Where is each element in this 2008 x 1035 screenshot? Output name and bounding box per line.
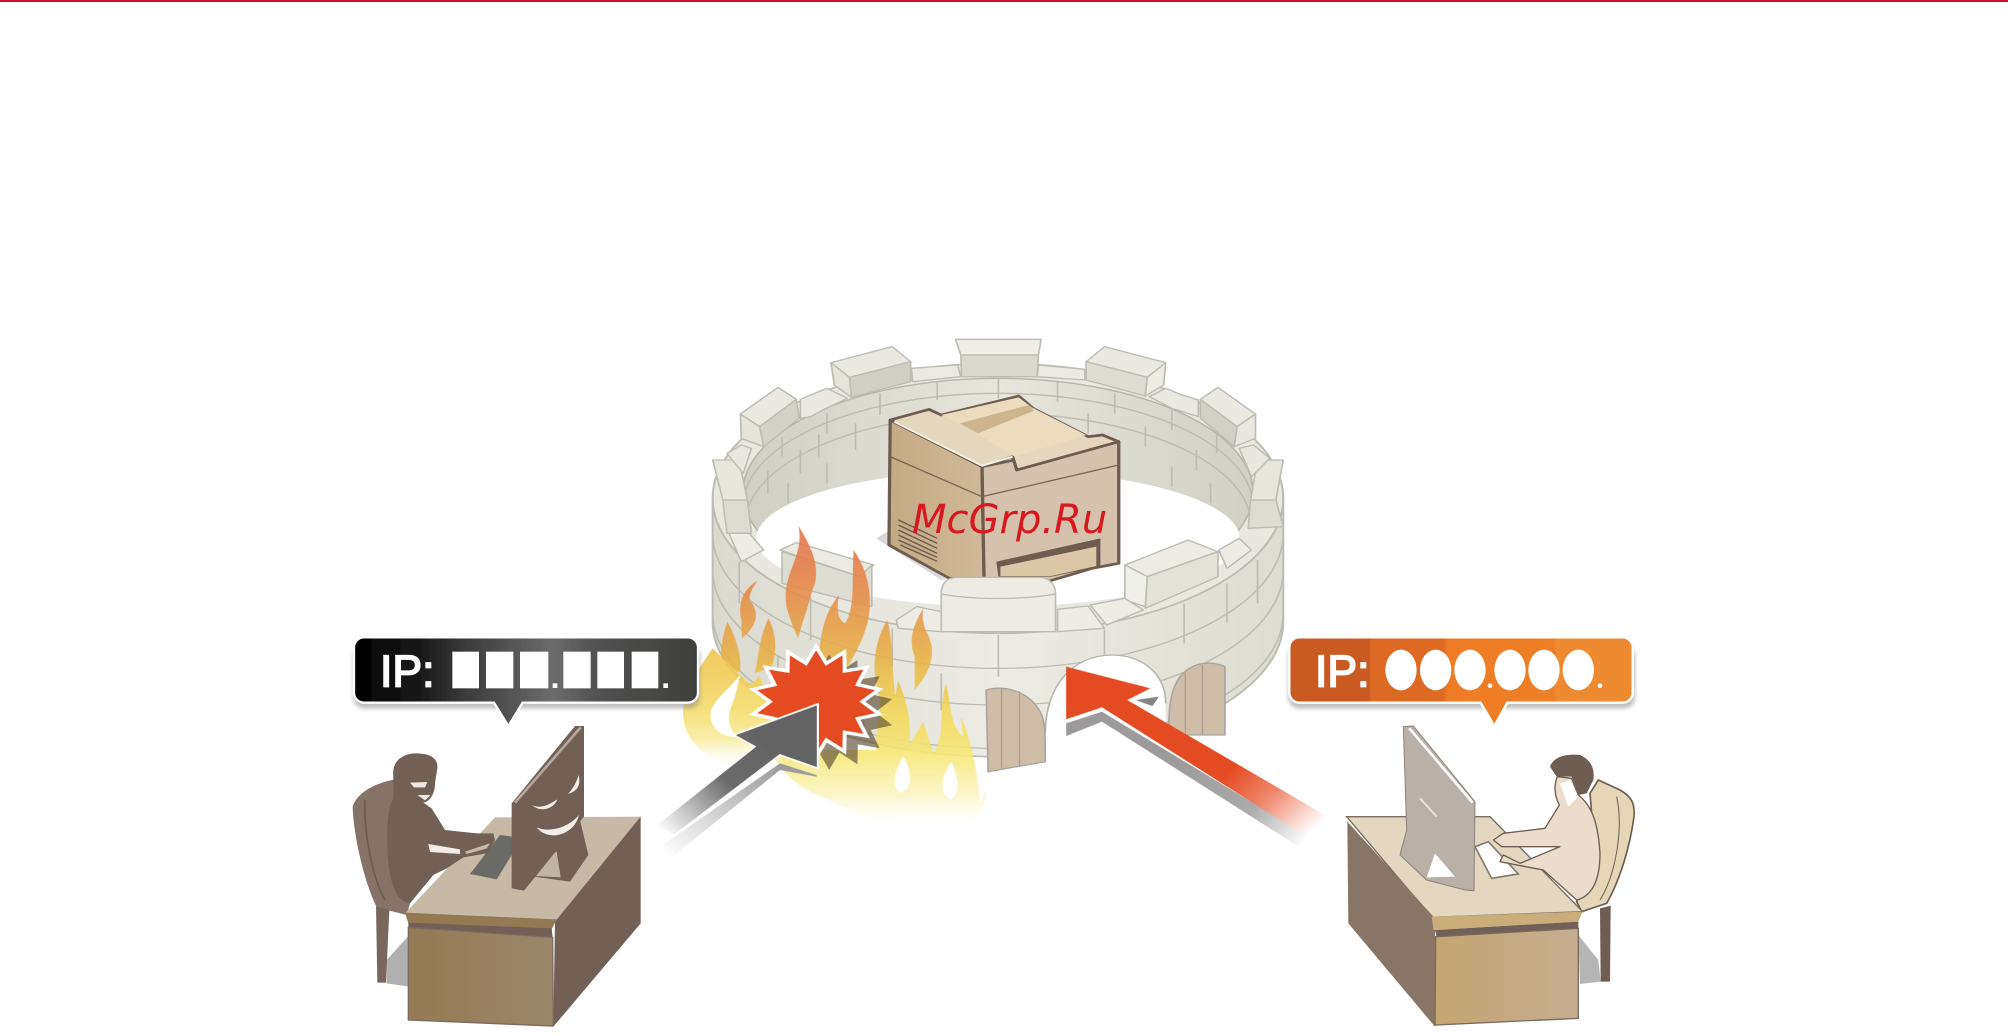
- user desk: [1347, 817, 1583, 1027]
- attacker speech bubble: [354, 637, 698, 726]
- printer: [876, 396, 1119, 582]
- gate door right planks: [1185, 665, 1202, 735]
- printer right face: [982, 442, 1119, 582]
- gate door left planks: [1002, 688, 1020, 768]
- flame gaps: [710, 675, 958, 799]
- legitimate user workstation: [1288, 637, 1635, 1027]
- front merlons and rim: [729, 533, 1251, 632]
- floor inside the wall: [756, 470, 1240, 607]
- flames: [683, 526, 986, 830]
- printer paper tray: [996, 538, 1100, 577]
- blocked arrow: [654, 704, 818, 835]
- inner brick courses: [746, 379, 1252, 512]
- attacker bubble shadow: [353, 645, 700, 708]
- printer left face: [889, 420, 984, 578]
- blocked arrow shadow: [658, 763, 817, 858]
- gate door left: [986, 688, 1045, 772]
- top red rule: [0, 0, 2008, 2]
- user IP label: IP:: [1315, 648, 1370, 697]
- attacker keyboard: [470, 835, 513, 879]
- desk floor shadow: [1578, 935, 1601, 984]
- attacker workstation: [353, 637, 700, 1027]
- printer floor shadow: [876, 530, 949, 580]
- watermark: McGrp.Ru: [912, 497, 1107, 543]
- attacker chair: [353, 779, 410, 983]
- back merlons: [713, 339, 1283, 533]
- impact burst: [753, 647, 879, 757]
- attacker desk: [405, 817, 641, 1027]
- arrow tip shadow: [1136, 697, 1159, 706]
- user chair: [1577, 780, 1634, 982]
- wall outer body: [713, 498, 1283, 757]
- attacker figure: [387, 753, 495, 903]
- user bubble shadow: [1288, 645, 1635, 708]
- printer vents: [898, 520, 937, 561]
- user IP circles: [1385, 650, 1602, 690]
- burst shadow: [766, 654, 892, 770]
- attacker monitor: [512, 726, 588, 891]
- castle wall with printer inside: [713, 339, 1283, 772]
- user keyboard: [1475, 842, 1518, 878]
- allowed arrow: [1066, 667, 1333, 843]
- user speech bubble: [1289, 637, 1633, 726]
- gate door right: [1169, 663, 1225, 735]
- gateway arch opening: [1045, 655, 1166, 767]
- printer top: [890, 396, 1119, 470]
- wall inner face: [743, 378, 1253, 606]
- flames, burst and arrows: [654, 526, 1333, 858]
- user figure: [1493, 755, 1600, 900]
- wall top rim: [713, 363, 1283, 633]
- allowed arrow shadow: [1066, 712, 1306, 850]
- desk floor shadow: [387, 935, 409, 987]
- document feeder: [941, 397, 1086, 457]
- user monitor: [1400, 726, 1475, 891]
- attacker IP label: IP:: [380, 648, 435, 697]
- attacker IP blocks: [452, 652, 668, 688]
- outer brick courses: [713, 533, 1283, 748]
